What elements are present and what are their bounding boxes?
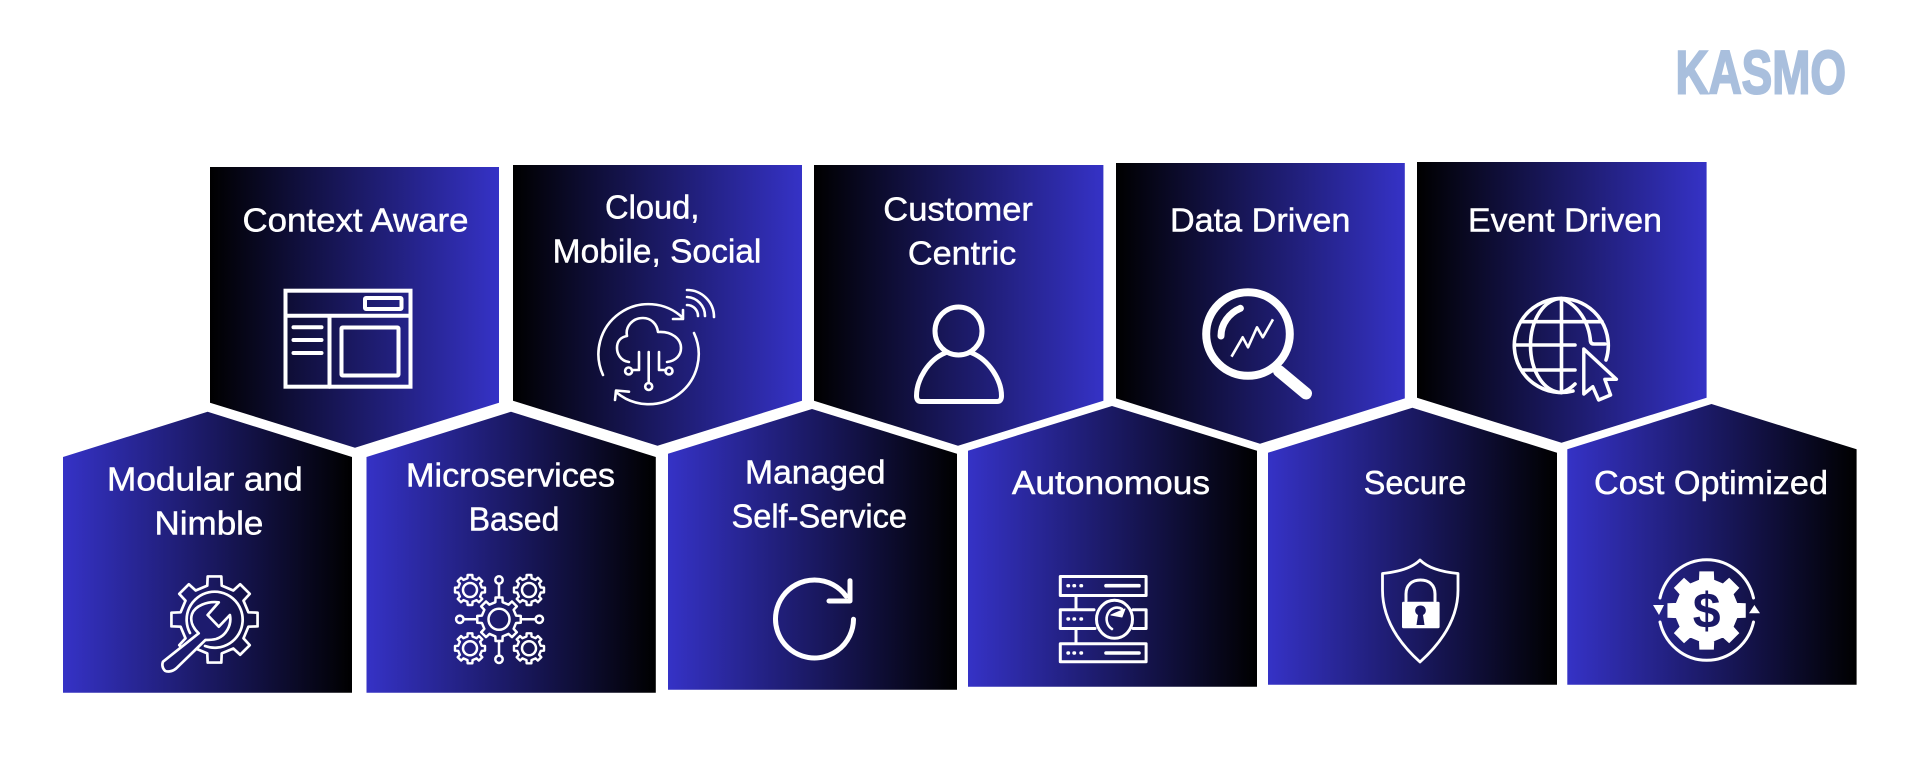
icon: server rack with refresh bbox=[1060, 576, 1146, 662]
heading: Customer Centric bbox=[883, 191, 1033, 271]
panel: Customer Centric bbox=[814, 165, 1103, 446]
icon: person bbox=[916, 307, 1002, 402]
heading: Modular and Nimble: Nimble bbox=[154, 504, 263, 541]
heading: Microservices Based: Based bbox=[469, 501, 559, 538]
panel: Cost Optimized bbox=[1567, 404, 1857, 685]
heading: Autonomous: Autonomous bbox=[1012, 464, 1210, 501]
icon: refresh arrow bbox=[776, 580, 854, 658]
heading: Cloud, Mobile, Social: Mobile, Social bbox=[553, 233, 761, 270]
panel: Autonomous bbox=[968, 406, 1257, 687]
heading: Context Aware: Context Aware bbox=[242, 202, 468, 239]
panel: Secure bbox=[1268, 408, 1557, 685]
panel: Event Driven bbox=[1417, 162, 1707, 443]
heading: Customer Centric: Centric bbox=[908, 234, 1016, 271]
panel: Microservices Based bbox=[366, 412, 656, 693]
icon: cloud with circuit and wifi bbox=[598, 290, 714, 404]
icon: dollar gear with cycle arrows: $ bbox=[1693, 583, 1721, 639]
heading: Microservices Based bbox=[406, 457, 615, 538]
icon: globe with cursor bbox=[1514, 298, 1616, 400]
panel: Context Aware bbox=[210, 167, 499, 448]
heading: Customer Centric: Customer bbox=[883, 191, 1033, 228]
panel: Data Driven bbox=[1116, 163, 1405, 444]
heading: Modular and Nimble: Modular and bbox=[107, 461, 303, 498]
heading: Event Driven: Event Driven bbox=[1468, 202, 1662, 239]
heading: Cost Optimized: Cost Optimized bbox=[1594, 464, 1828, 501]
panel: Cloud, Mobile, Social bbox=[513, 165, 802, 446]
logo: KASMO: KASMO bbox=[1676, 39, 1846, 107]
panel: Modular and Nimble bbox=[63, 412, 352, 693]
heading: Cloud, Mobile, Social: Cloud, bbox=[605, 188, 699, 225]
icon: gear and wrench bbox=[162, 576, 258, 671]
heading: Secure: Secure bbox=[1364, 464, 1466, 501]
heading: Modular and Nimble bbox=[107, 461, 303, 541]
heading: Data Driven: Data Driven bbox=[1170, 202, 1350, 239]
heading: Managed Self-Service: Managed bbox=[745, 453, 886, 490]
panel: Managed Self-Service bbox=[668, 409, 957, 690]
icon: application window bbox=[286, 291, 410, 387]
icon: magnifier with chart bbox=[1206, 292, 1306, 394]
heading: Cloud, Mobile, Social bbox=[553, 188, 761, 270]
heading: Managed Self-Service: Self-Service bbox=[732, 497, 907, 534]
heading: Microservices Based: Microservices bbox=[406, 457, 615, 494]
icon: dollar gear with cycle arrows bbox=[1653, 560, 1760, 660]
icon: network of gears bbox=[455, 575, 544, 663]
heading: Managed Self-Service bbox=[732, 453, 907, 534]
icon: shield with padlock bbox=[1382, 560, 1458, 662]
